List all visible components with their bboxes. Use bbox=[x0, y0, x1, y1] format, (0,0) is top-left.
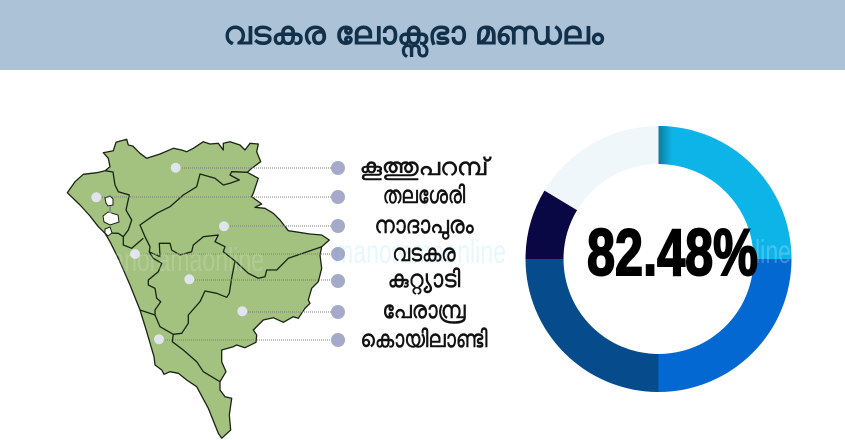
donut percentage: 82.48% bbox=[587, 215, 758, 289]
title: വടകര ലോക്സഭാ മണ്ഡലം bbox=[223, 14, 604, 51]
port enclave bbox=[103, 196, 119, 236]
legend dots bbox=[331, 161, 345, 347]
label 1: കൂത്തുപറമ്പ് bbox=[360, 154, 488, 181]
district boundaries bbox=[105, 171, 322, 382]
title banner bbox=[0, 0, 845, 70]
segment: pale bbox=[544, 126, 658, 210]
label 3: നാദാപുരം bbox=[374, 212, 474, 239]
segment: blue bbox=[658, 259, 792, 392]
segment labels bbox=[360, 154, 492, 353]
segment: light blue bbox=[658, 126, 792, 259]
watermark bbox=[92, 233, 791, 278]
leader lines bbox=[96, 168, 333, 340]
map markers bbox=[91, 163, 247, 344]
map outline bbox=[67, 139, 329, 438]
donut chart bbox=[526, 126, 792, 392]
watermark: manoramaonline bbox=[92, 241, 264, 278]
segment: navy bbox=[526, 190, 577, 259]
label 5: കുറ്റ്യാടി bbox=[388, 266, 460, 293]
label 4: വടകര bbox=[392, 240, 456, 267]
label 6: പേരാമ്പ്ര bbox=[382, 297, 466, 324]
segment: start shading bbox=[658, 126, 672, 165]
label 7: കൊയിലാണ്ടി bbox=[360, 326, 488, 353]
port connector bbox=[109, 206, 111, 213]
map of constituency bbox=[67, 139, 329, 438]
segment: dark blue bbox=[526, 259, 658, 392]
label 2: തലശേരി bbox=[383, 182, 465, 209]
watermark: manoramaonline bbox=[334, 233, 506, 270]
